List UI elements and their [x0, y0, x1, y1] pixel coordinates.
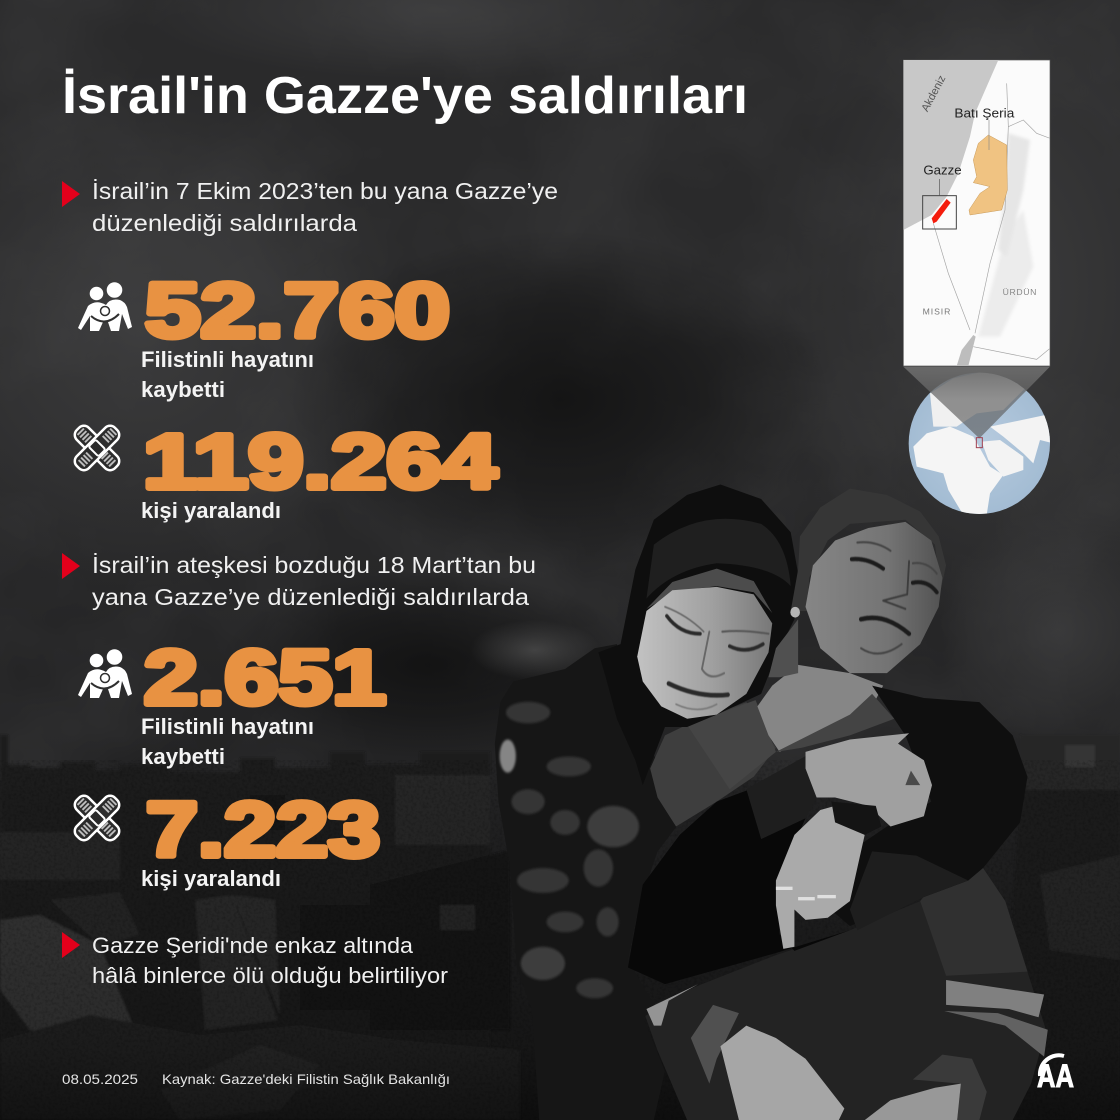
title: İsrail'in Gazze'ye saldırıları — [62, 67, 748, 125]
label: Gazze: Gazze — [923, 162, 962, 177]
label: Filistinli hayatını kaybetti — [141, 347, 314, 402]
map panel: Gaza and region — [903, 60, 1053, 515]
wrist lace — [831, 802, 881, 835]
label: Filistinli hayatını kaybetti: kaybetti — [141, 377, 225, 402]
girl's lower-left hand — [720, 1026, 844, 1120]
ring — [905, 771, 920, 785]
right lower sleeve — [913, 1055, 987, 1120]
label: kişi yaralandı: kişi yaralandı — [141, 866, 281, 891]
girl's lower-right hand — [865, 1084, 961, 1120]
label: Mısır: MISIR — [923, 306, 950, 316]
stat: 2.651: 2.651 — [144, 635, 386, 721]
text block: under the rubble — [62, 932, 448, 988]
bullet marker — [62, 932, 80, 958]
stat: 7.223: 7.223 — [146, 787, 380, 873]
label: Filistinli hayatını kaybetti: Filistinli hayatını — [141, 347, 314, 372]
robe floral pattern — [500, 702, 639, 998]
jacket trim left — [646, 984, 698, 1026]
girl's jacket — [643, 868, 1046, 1120]
text block: since 18 March: yana Gazze’ye düzenlediği saldırılarda — [92, 584, 529, 610]
icon: family — [78, 649, 132, 698]
stat: 119.264: 119.264 — [143, 419, 497, 505]
text block: intro since 7 October — [62, 178, 558, 236]
bullet marker — [62, 553, 80, 579]
Red Sea tip — [957, 335, 976, 366]
locator rectangle — [976, 438, 982, 448]
Africa — [913, 427, 1003, 515]
text block: since 18 March: İsrail’in ateşkesi bozduğu 18 Mart’tan bu — [92, 552, 536, 578]
lace sleeve edge — [850, 851, 968, 930]
locator globe — [903, 367, 1053, 515]
borders — [933, 83, 1050, 359]
collar — [776, 694, 894, 752]
jacket trim right — [946, 980, 1044, 1017]
girl's hair bun and ear — [769, 619, 798, 677]
girl's grey shirt — [650, 702, 776, 827]
ribbed cuff — [691, 1005, 739, 1084]
Mediterranean sea — [903, 60, 998, 230]
Gaza locator box — [923, 196, 956, 229]
text block: intro since 7 October: İsrail’in 7 Ekim 2023’ten bu yana Gazze’ye — [92, 178, 558, 204]
lace cuff — [746, 756, 817, 839]
headscarf folds — [646, 519, 791, 599]
Europe — [930, 374, 1024, 427]
footer: source: Kaynak: Gazze'deki Filistin Sağlık Bakanlığı — [162, 1071, 450, 1087]
woman's upper hand — [806, 733, 932, 827]
text block: since 18 March — [62, 552, 536, 610]
Gaza strip — [932, 199, 951, 223]
photo: mother and daughter embracing — [495, 485, 1048, 1120]
woman's patterned robe — [495, 644, 680, 1120]
woman's lower hand — [776, 806, 865, 949]
logo: AA: AA — [1037, 1058, 1074, 1094]
girl's neck — [757, 665, 883, 752]
jacket side panel — [920, 868, 1027, 976]
girl's right sleeve — [802, 686, 1027, 926]
background: ruined city skyline — [0, 735, 1120, 1120]
text block: under the rubble: Gazze Şeridi'nde enkaz altında — [92, 933, 414, 958]
stat: 52.760: 52.760 — [145, 268, 450, 354]
label: Ürdün: ÜRDÜN — [1003, 287, 1036, 297]
icon: bandage — [59, 410, 135, 486]
icon: family — [78, 282, 132, 331]
Arabia and Asia — [982, 413, 1053, 477]
earring — [790, 607, 800, 618]
girl's face — [806, 522, 942, 673]
text block: under the rubble: hâlâ binlerce ölü olduğu belirtiliyor — [92, 963, 448, 988]
text block: intro since 7 October: düzenlediği saldırılarda — [92, 210, 357, 236]
black headscarf — [598, 485, 798, 785]
icon: bandage — [59, 780, 135, 856]
woman's face — [637, 587, 772, 719]
label: Filistinli hayatını kaybetti: kaybetti — [141, 744, 225, 769]
label: kişi yaralandı: kişi yaralandı — [141, 498, 281, 523]
terrain shading — [978, 133, 1033, 337]
footer: date: 08.05.2025 — [62, 1071, 138, 1087]
West Bank — [969, 135, 1007, 215]
label: Akdeniz: Akdeniz — [919, 74, 948, 114]
rings on lower hand — [776, 887, 836, 900]
scarf band — [646, 569, 772, 613]
girl's facial features — [852, 542, 937, 654]
label: Filistinli hayatını kaybetti: Filistinli hayatını — [141, 714, 314, 739]
woman's facial features — [665, 607, 769, 709]
funnel from map to globe — [903, 367, 1050, 438]
bullet marker — [62, 181, 80, 207]
woman's black sleeve — [628, 789, 850, 984]
label: Batı Şeria: Batı Şeria — [954, 105, 1015, 120]
girl's hair — [791, 489, 946, 611]
label: Filistinli hayatını kaybetti — [141, 714, 314, 769]
